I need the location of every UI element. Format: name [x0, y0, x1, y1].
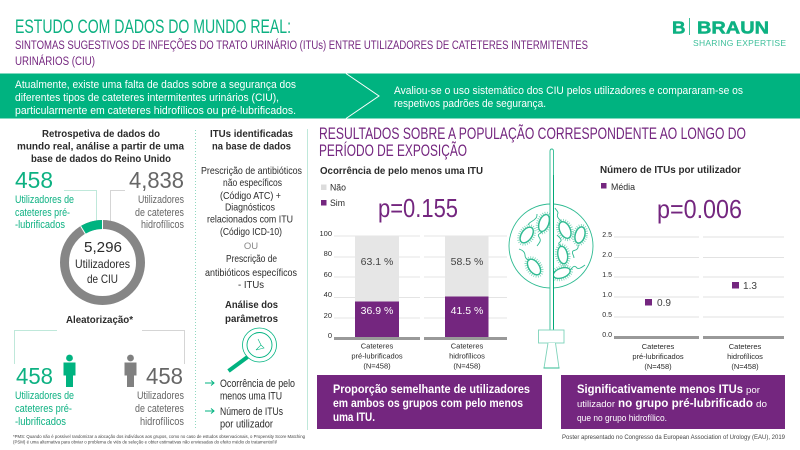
banner: context and objective	[0, 74, 800, 118]
source note: Poster apresentado no Congresso da European Association of Urology (EAU), 2019	[562, 435, 786, 441]
heading: retrospective: base de dados do Reino Unido	[31, 154, 171, 165]
bar chart: 36.9 %	[361, 305, 393, 317]
chart title: Número de ITUs por utilizador	[600, 164, 741, 176]
bar chart: (N=458)	[363, 362, 391, 370]
illustration: catheter with bacteria	[509, 149, 593, 368]
bar chart: 40	[324, 290, 332, 299]
p value: p=0.006	[657, 194, 742, 224]
bar chart: pré-lubrificados	[351, 352, 403, 360]
callout: similar proportion	[317, 375, 542, 429]
stat: 458 pre-lubricated users	[15, 167, 74, 231]
bar chart: (N=458)	[453, 362, 481, 370]
stat: 458 pre-lubricated after matching: cateteres pré-	[15, 403, 72, 415]
dot chart: Cateteres	[729, 342, 762, 351]
bar chart: Cateteres	[451, 342, 484, 350]
callout: significantly fewer UTIs: utilizador	[577, 399, 615, 409]
donut chart: 5,296 users: de CIU	[87, 272, 118, 286]
list: parameters	[205, 378, 295, 430]
subtitle: URINÁRIOS (CIU)	[15, 55, 95, 68]
bar chart: 80	[324, 249, 332, 258]
heading: UTIs identified: na base de dados	[212, 140, 291, 152]
panel: retrospective study population	[14, 129, 184, 428]
stat: 458 hydrophilic after matching: hidrofílicos	[140, 416, 184, 428]
stat: 4,838 hydrophilic users: 4,838	[129, 167, 184, 193]
logo: B. Braun: BRAUN	[697, 17, 769, 37]
dot chart: 1.3	[743, 281, 757, 292]
text: identification criteria: (Código ATC) +	[220, 190, 281, 202]
text: identification criteria: Prescrição de antibióticos	[201, 165, 302, 177]
bar chart: 60	[324, 270, 332, 279]
title: ESTUDO COM DADOS DO MUNDO REAL:	[15, 17, 291, 38]
chart title: Ocorrência de pelo menos uma ITU	[320, 165, 483, 177]
bar chart	[319, 229, 507, 370]
stat: 4,838 hydrophilic users: de cateteres	[135, 207, 184, 219]
icon: arrow	[205, 380, 214, 386]
heading: results: PERÍODO DE EXPOSIÇÃO	[319, 140, 467, 160]
stat: 4,838 hydrophilic users: hidrofílicos	[141, 219, 184, 231]
stat: 458 pre-lubricated after matching: Utilizadores de	[15, 390, 74, 402]
heading: UTIs identified	[210, 128, 293, 152]
stat: 458 hydrophilic after matching	[135, 363, 184, 428]
callout: significantly fewer UTIs: por	[746, 385, 760, 395]
heading: randomisation: Aleatorização*	[66, 314, 134, 326]
panel: number of UTIs per user	[600, 164, 784, 371]
heading: retrospective: mundo real, análise a partir de uma	[17, 142, 184, 152]
stat: 458 hydrophilic after matching: Utilizadores	[137, 390, 184, 402]
legend: Sim	[330, 198, 345, 209]
icon: arrow	[205, 408, 214, 414]
heading: UTIs identified: ITUs identificadas	[210, 128, 293, 140]
callout: significantly fewer UTIs: que no grupo hidrofílico.	[577, 413, 667, 423]
dot chart: (N=458)	[644, 362, 672, 371]
p value: p=0.155	[378, 193, 458, 223]
donut chart: 5,296 users	[64, 220, 140, 300]
text: identification criteria: OU	[244, 241, 258, 252]
icon: green person	[64, 355, 76, 387]
stat: 458 hydrophilic after matching: de cateteres	[135, 403, 184, 415]
list: parameters: por utilizador	[220, 418, 273, 430]
text: identification criteria: antibióticos específicos	[205, 267, 297, 279]
legend	[321, 182, 346, 209]
text: identification criteria	[201, 165, 302, 291]
stat: 4,838 hydrophilic users	[129, 167, 184, 231]
list: parameters: Ocorrência de pelo	[220, 378, 295, 390]
stat: 458 pre-lubricated after matching: -lubrificados	[15, 416, 66, 428]
stat: 458 hydrophilic after matching: 458	[146, 363, 183, 389]
callout: similar proportion: Proporção semelhante de utilizadores	[333, 384, 530, 396]
bar chart: 58.5 %	[451, 256, 483, 268]
logo: B. Braun	[672, 17, 786, 48]
stat: 458 pre-lubricated users: cateteres pré-	[15, 207, 70, 219]
text: identification criteria: (Código ICD-10)	[220, 226, 282, 238]
banner: context and objective: diferentes tipos de cateteres intermitentes urinários (CIU),	[15, 92, 279, 104]
dot chart: hidrofílicos	[727, 352, 763, 361]
callout: similar proportion: em ambos os grupos com pelo menos	[333, 398, 523, 410]
heading: parameter analysis: parâmetros	[225, 313, 278, 325]
callout: similar proportion: uma ITU.	[333, 412, 375, 424]
bar chart: Cateteres	[361, 342, 394, 350]
list: parameters: menos uma ITU	[220, 390, 282, 402]
dot chart: 2.0	[602, 252, 612, 259]
donut chart: 5,296 users: Utilizadores	[75, 257, 130, 271]
list: parameters: Número de ITUs	[220, 406, 283, 418]
footnote	[13, 434, 305, 444]
heading: retrospective: Retrospetiva de dados do	[42, 129, 160, 140]
dot chart: pré-lubrificados	[632, 352, 684, 361]
banner: context and objective: respetivos padrões de segurança.	[394, 98, 546, 110]
text: identification criteria: - ITUs	[238, 279, 264, 291]
stat: 4,838 hydrophilic users: Utilizadores	[138, 194, 184, 206]
callout: significantly fewer UTIs: do	[756, 399, 767, 409]
stat: 458 pre-lubricated after matching	[15, 363, 74, 428]
banner: context and objective: Avaliou-se o uso sistemático dos CIU pelos utilizadores e compararam-se os	[394, 85, 743, 97]
donut chart: 5,296 users: 5,296	[84, 239, 122, 256]
legend: Média	[611, 182, 636, 193]
text: identification criteria: relacionados com ITU	[207, 214, 293, 226]
callout: significantly fewer UTIs	[561, 375, 785, 429]
icon: grey person	[124, 355, 136, 387]
dot chart: 2.5	[602, 232, 612, 239]
dot chart: (N=458)	[731, 362, 759, 371]
dot chart: 1.5	[602, 272, 612, 279]
subtitle	[15, 39, 588, 68]
stat: 458 pre-lubricated users: 458	[15, 167, 53, 193]
bar chart: 41.5 %	[451, 305, 483, 317]
bar chart: 63.1 %	[361, 256, 393, 268]
panel: occurrence of at least one UTI	[319, 165, 507, 370]
dot chart: Cateteres	[642, 342, 675, 351]
bar chart: 20	[324, 311, 332, 320]
dot chart: 0.0	[602, 332, 612, 339]
footnote: *PMS: Quando não é possível randomizar a alocação dos indivíduos aos grupos, como no caso de estudos observacionais, o Propensity Score Matching	[13, 434, 305, 439]
heading: parameter analysis: Análise dos	[225, 299, 278, 311]
stat: 458 pre-lubricated after matching: 458	[16, 363, 53, 389]
heading: parameter analysis	[225, 299, 278, 325]
subtitle: SINTOMAS SUGESTIVOS DE INFEÇÕES DO TRATO URINÁRIO (ITUs) ENTRE UTILIZADORES DE CATETERES INTERMITENTES	[15, 39, 588, 52]
heading: results	[319, 123, 746, 160]
footnote: (PSM) é uma alternativa para obviar o problema de viés de seleção e obter estimativas não enviesadas do efeito médio do tratamento/II/	[13, 440, 278, 444]
stat: 458 pre-lubricated users: -lubrificados	[15, 219, 65, 231]
text: identification criteria: Diagnósticos	[225, 202, 275, 214]
bar chart: hidrofílicos	[449, 352, 485, 360]
callout: significantly fewer UTIs: no grupo pré-lubrificado	[618, 398, 753, 410]
dot chart: 0.5	[602, 312, 612, 319]
bar chart: 100	[319, 229, 332, 238]
icon: magnifying glass	[228, 328, 276, 371]
dot chart	[602, 232, 784, 371]
text: identification criteria: Prescrição de	[226, 253, 277, 265]
legend: Não	[330, 182, 346, 194]
logo: B. Braun: B	[672, 17, 686, 37]
banner: context and objective: Atualmente, existe uma falta de dados sobre a segurança dos	[15, 79, 296, 91]
dot chart: 1.0	[602, 292, 612, 299]
dot chart: 0.9	[657, 298, 671, 309]
legend	[601, 182, 636, 193]
text: identification criteria: não específicos	[223, 177, 282, 189]
callout: significantly fewer UTIs: Significativamente menos ITUs	[577, 384, 743, 396]
banner: context and objective: particularmente em cateteres hidrofílicos ou pré-lubrificados.	[15, 105, 296, 117]
panel: UTIs identified in the database	[201, 128, 302, 430]
stat: 458 pre-lubricated users: Utilizadores de	[15, 194, 74, 206]
logo: B. Braun: SHARING EXPERTISE	[693, 38, 786, 48]
heading: retrospective	[17, 129, 184, 165]
bar chart: 0	[328, 331, 332, 340]
